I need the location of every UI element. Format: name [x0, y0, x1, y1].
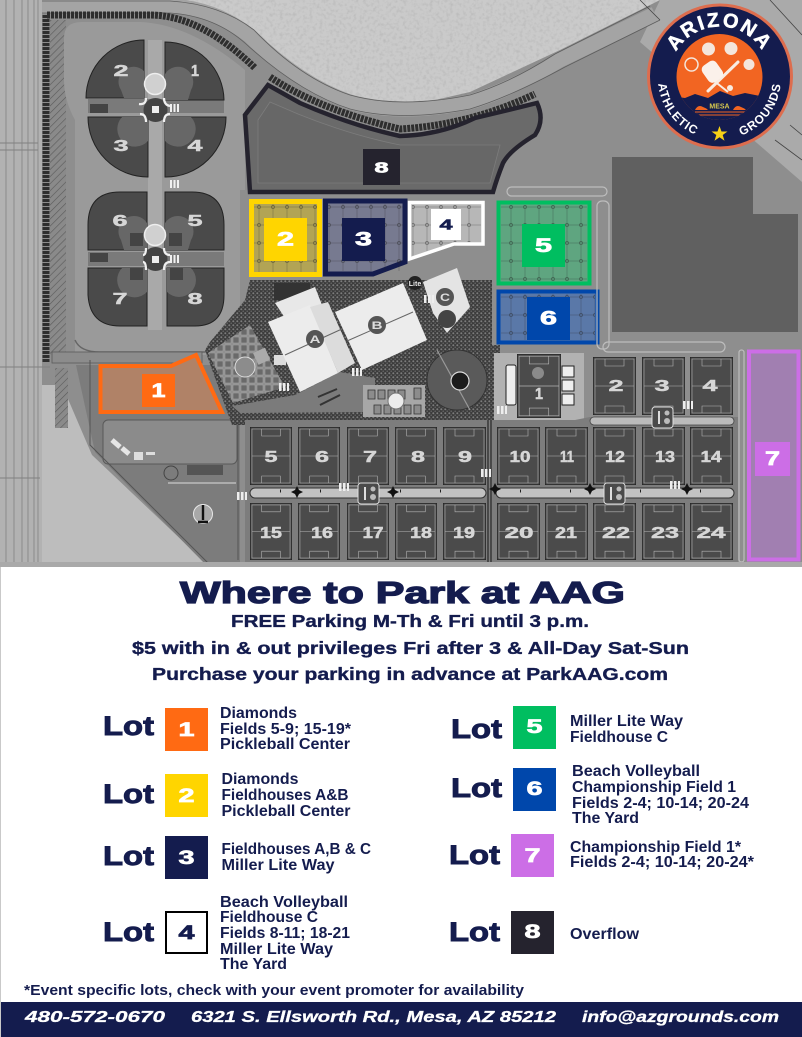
- footer bar: [1, 1002, 802, 1037]
- field 24: 24: [696, 525, 726, 542]
- terrain base: [0, 0, 802, 567]
- terrain speckle: [212, 0, 656, 101]
- icon: miller lite badge: Lite: [409, 281, 421, 288]
- lot 2: [252, 202, 320, 274]
- legend: lot 6: 6: [526, 779, 542, 800]
- field 21: [545, 503, 588, 560]
- diamond 8: [167, 268, 224, 326]
- icon: water tower marker: [194, 504, 212, 524]
- text: free parking: FREE Parking M-Th & Fri until 3 p.m.: [231, 611, 589, 631]
- diamond 1: 1: [191, 63, 199, 80]
- legend: lot 7: Lot: [449, 840, 500, 870]
- field 15: 15: [260, 525, 282, 542]
- field 6: [298, 427, 340, 485]
- diamond 4: 4: [188, 138, 203, 155]
- legend: lot 4: [103, 894, 350, 973]
- lot 1: [100, 355, 222, 412]
- diamond 5: [165, 192, 224, 250]
- footer address: 6321 S. Ellsworth Rd., Mesa, AZ 85212: [191, 1009, 556, 1026]
- lot 4: [410, 202, 483, 259]
- fieldhouse B: [335, 283, 427, 370]
- legend: lot 1: Fields 5-9; 15-19*: [220, 721, 352, 738]
- lot 6: [498, 292, 598, 342]
- legend: lot 2: Pickleball Center: [222, 803, 350, 820]
- lot 3: [326, 201, 405, 274]
- legend: lot 5: 5: [526, 717, 543, 738]
- lot 6 marker: 6: [540, 308, 557, 330]
- perimeter paths: [507, 187, 744, 562]
- diamond 3: 3: [114, 138, 129, 155]
- field 2 upper: [593, 357, 636, 415]
- fieldhouse C: [423, 268, 470, 333]
- heading: Where to Park at AAG: [180, 575, 625, 610]
- legend: lot 6: Championship Field 1: [572, 779, 736, 796]
- road to lot 1: [52, 352, 202, 363]
- fields backdrop: [245, 417, 738, 562]
- diamond 1: [165, 42, 224, 100]
- bottom map edge: [0, 562, 802, 567]
- diamond 6: 6: [112, 213, 128, 230]
- lot 2 marker: 2: [277, 230, 294, 250]
- field 11: 11: [560, 449, 574, 466]
- legend: lot 5: Miller Lite Way: [570, 713, 683, 730]
- landscaped tree area: [205, 280, 500, 425]
- lot 8 overflow: [245, 85, 541, 192]
- legend: lot 6: Lot: [451, 773, 502, 803]
- lot 7 marker: [755, 442, 790, 476]
- icon: sports complex badge east: [604, 483, 625, 504]
- footnote: *Event specific lots, check with your event promoter for availability: [24, 982, 525, 999]
- walkway and parking strip below fieldhouses: [232, 372, 375, 413]
- diamond 6: [88, 192, 147, 250]
- lot 8 marker: [363, 149, 400, 185]
- legend: lot 2: Fieldhouses A&B: [222, 787, 348, 804]
- field 7: 7: [363, 449, 377, 466]
- legend: lot 3: [103, 836, 371, 879]
- championship field stands: [506, 365, 574, 405]
- footer email: info@azgrounds.com: [582, 1009, 779, 1026]
- field 19: [443, 503, 486, 560]
- legend: lot 7: Championship Field 1*: [570, 839, 742, 856]
- logo wordmark: Arizona: ARIZONA: [668, 12, 770, 52]
- legend: lot 4: Lot: [103, 917, 154, 947]
- lot 5 marker: 5: [535, 236, 553, 257]
- highway lines top right: [640, 0, 802, 160]
- legend: lot 1: Pickleball Center: [220, 736, 350, 753]
- diamond 8: 8: [188, 291, 203, 308]
- soccer fields: [250, 354, 733, 560]
- field 11: [545, 427, 588, 485]
- bottom left desert terrain: [42, 385, 210, 567]
- field 14: 14: [700, 449, 722, 466]
- diamond complex hubs: [139, 74, 180, 271]
- dark pad behind fieldhouses: [274, 283, 310, 300]
- field 16: 16: [311, 525, 333, 542]
- legend: lot 3: Lot: [103, 841, 154, 871]
- legend: lot 3: 3: [178, 848, 194, 869]
- field 24: [690, 503, 733, 560]
- unused dark block: [612, 157, 798, 332]
- logo mountains and Mesa: [682, 91, 758, 120]
- legend: lot 5: Fieldhouse C: [570, 729, 668, 746]
- field 8: 8: [411, 449, 425, 466]
- field 22: [593, 503, 636, 560]
- central boulevard: [250, 420, 734, 562]
- field 3 upper: 3: [654, 378, 670, 395]
- legend: lot 8: Overflow: [570, 926, 640, 943]
- legend: lot 5: [451, 706, 683, 749]
- legend: lot 3: Fieldhouses A,B & C: [222, 841, 371, 858]
- legend: lot 6: [451, 763, 749, 827]
- legend: lot 6: Beach Volleyball: [572, 763, 700, 780]
- fieldhouse B: B: [372, 320, 383, 332]
- field 18: [395, 503, 437, 560]
- logo mountains and Mesa: MESA: [709, 104, 730, 110]
- legend: lot 2: Diamonds: [222, 771, 299, 788]
- hatched buffer strip: [50, 20, 66, 355]
- lot 3 marker: 3: [355, 230, 372, 250]
- the yard circular plaza: [427, 350, 487, 410]
- panel: site map: [0, 0, 802, 567]
- championship field 1: 1: [535, 386, 543, 403]
- diamond 2: [86, 40, 144, 98]
- legend: lot 8: 8: [524, 922, 540, 943]
- legend: lot 3: Miller Lite Way: [222, 857, 335, 874]
- fieldhouse A: A: [310, 334, 321, 346]
- service buildings: [112, 440, 236, 483]
- text: purchase in advance: Purchase your parking in advance at ParkAAG.com: [152, 664, 668, 684]
- field 8: [395, 427, 437, 485]
- field 10: 10: [510, 449, 531, 466]
- logo star: [712, 126, 728, 141]
- legend: lot 7: 7: [524, 846, 540, 867]
- diamond 5: 5: [188, 213, 203, 230]
- diamond 7: [88, 268, 147, 326]
- field 23: [642, 503, 685, 560]
- upper boulevard: [590, 417, 734, 425]
- field 4 upper: 4: [702, 378, 718, 395]
- legend: lot 6: The Yard: [572, 810, 639, 827]
- fieldhouse C: C: [440, 292, 450, 304]
- diamonds lawn: [64, 22, 245, 355]
- hedge line along the road: [46, 15, 535, 362]
- left highway strip: [0, 0, 42, 567]
- field 22: 22: [602, 525, 630, 542]
- logo wordmark: Athletic: ATHLETIC: [658, 84, 698, 134]
- legend: lot 1: [103, 705, 352, 753]
- legend: lot 6: Fields 2-4; 10-14; 20-24: [572, 795, 749, 812]
- logo wordmark: Grounds: GROUNDS: [740, 84, 780, 134]
- field 12: [593, 427, 636, 485]
- lot 1 marker: 1: [152, 381, 166, 402]
- diamond 4: [165, 117, 226, 177]
- logo: Arizona Athletic Grounds: [647, 4, 793, 150]
- white sheet: [0, 567, 802, 1037]
- field 20: 20: [504, 525, 534, 542]
- text: paid parking: $5 with in & out privileges Fri after 3 & All-Day Sat-Sun: [132, 638, 689, 658]
- legend: lot 1: Diamonds: [220, 705, 297, 722]
- legend: lot 7: Fields 2-4; 10-14; 20-24*: [570, 854, 755, 871]
- legend: lot 4: 4: [178, 923, 195, 944]
- field 13: 13: [655, 449, 675, 466]
- field 12: 12: [605, 449, 625, 466]
- field 3 upper: [642, 357, 685, 415]
- field 9: [443, 427, 486, 485]
- diamond 2: 2: [114, 63, 129, 80]
- field 20: [497, 503, 540, 560]
- legend: lot 2: [103, 771, 350, 820]
- field 17: [347, 503, 389, 560]
- lower service lawn: [76, 365, 240, 567]
- lot 7: [749, 352, 798, 560]
- legend: lot 2: Lot: [103, 779, 154, 809]
- field 15: [250, 503, 292, 560]
- legend: lot 4: Miller Lite Way: [220, 941, 333, 958]
- field 13: [642, 427, 685, 485]
- field 5: [250, 427, 292, 485]
- upper desert terrain: [140, 0, 660, 108]
- legend: lot 4: Fields 8-11; 18-21: [220, 925, 350, 942]
- legend: lot 1: 1: [178, 720, 195, 741]
- pickleball center: [208, 325, 286, 403]
- legend: lot 8: [449, 911, 640, 954]
- lighter wedge behind logo: [640, 0, 802, 182]
- legend: lot 1: Lot: [103, 711, 154, 741]
- icon: miller lite badge: [408, 276, 422, 290]
- icon: restrooms: [237, 299, 693, 496]
- lot 7 marker: 7: [765, 449, 780, 470]
- legend: lot 5: Lot: [451, 714, 502, 744]
- diamond 7: 7: [112, 291, 128, 308]
- legend: lot 4: Beach Volleyball: [220, 894, 348, 911]
- championship plaza: [494, 353, 584, 420]
- lot 5: [498, 202, 590, 284]
- diamond fields: [86, 40, 226, 330]
- legend: lot 4: The Yard: [220, 956, 287, 973]
- legend: lot 8: Lot: [449, 917, 500, 947]
- field 14: [690, 427, 733, 485]
- curved access road: [42, 6, 655, 109]
- field 9: 9: [458, 449, 472, 466]
- diamond 3: [88, 117, 148, 177]
- field 23: 23: [651, 525, 679, 542]
- lot 4 marker: 4: [440, 216, 454, 234]
- icon: sports complex badge north: [652, 407, 673, 428]
- icon: wayfinding stars: [291, 483, 693, 498]
- footer phone: 480-572-0670: [24, 1009, 165, 1026]
- legend: lot 2: 2: [178, 786, 194, 807]
- field 21: 21: [555, 525, 577, 542]
- lot 8 marker: 8: [374, 160, 388, 176]
- field 6: 6: [315, 449, 329, 466]
- logo sports balls and crossed paddle and bat: [685, 42, 754, 92]
- field 19: 19: [453, 525, 475, 542]
- championship field 1: [517, 354, 561, 418]
- field 18: 18: [410, 525, 432, 542]
- legend: lot 4: Fieldhouse C: [220, 909, 318, 926]
- field 7: [347, 427, 389, 485]
- field 2 upper: 2: [608, 378, 624, 395]
- icon: sports complex badge west: [358, 483, 379, 504]
- beach volleyball courts: [363, 385, 425, 417]
- fieldhouse A: [268, 287, 355, 392]
- field 16: [298, 503, 340, 560]
- diamond complex walkways: [88, 40, 224, 330]
- field 17: 17: [362, 525, 384, 542]
- field 4 upper: [690, 357, 733, 415]
- field 5: 5: [264, 449, 278, 466]
- legend: lot 7: [449, 834, 755, 877]
- field 10: [497, 427, 540, 485]
